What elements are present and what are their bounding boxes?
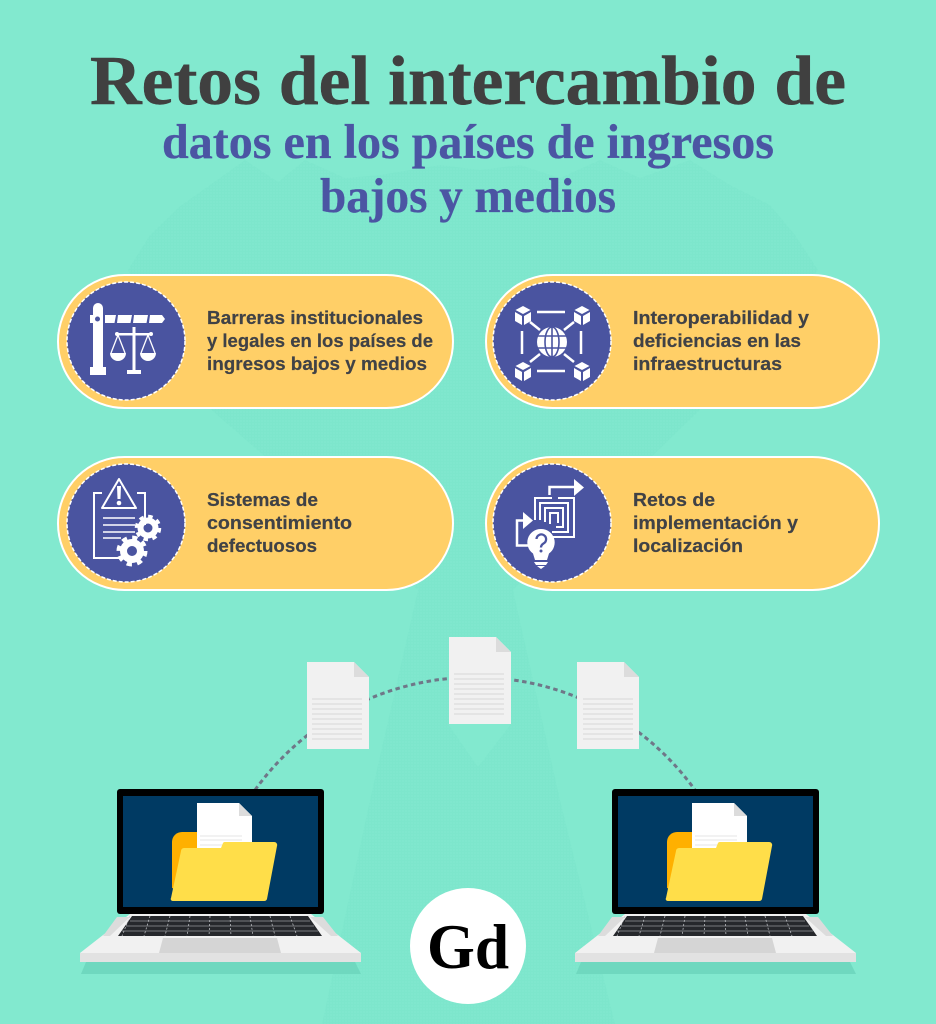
title line 3: bajos y medios: [320, 168, 616, 223]
label text: defectuosos: [207, 536, 317, 556]
pill background: [58, 457, 453, 590]
panel: barreras institucionales: [58, 275, 453, 408]
icon: document left: [307, 662, 369, 749]
icon: document right: [577, 662, 639, 749]
icon badge circle: [67, 464, 185, 582]
label text: localización: [633, 536, 743, 556]
label text: deficiencias en las: [633, 331, 801, 351]
label text: consentimiento: [207, 513, 352, 533]
icon: maze and light bulb: [517, 479, 584, 569]
label text: Retos de: [633, 490, 715, 510]
icon: warning document and gears: [94, 479, 160, 564]
icon badge circle: [67, 282, 185, 400]
title: [90, 43, 846, 223]
dotted transfer arc: [255, 677, 695, 790]
logo: Gd: [427, 911, 509, 982]
label text: Sistemas de: [207, 490, 318, 510]
label text: [207, 308, 433, 374]
label text: [633, 308, 809, 374]
laptop right: [575, 789, 856, 974]
title line 1: Retos del intercambio de: [90, 43, 846, 120]
label text: [633, 490, 798, 556]
icon: network globe: [515, 306, 590, 381]
pill background: [58, 275, 453, 408]
laptop left: [80, 789, 361, 974]
title line 2: datos en los países de ingresos: [162, 114, 774, 169]
label text: Interoperabilidad y: [633, 308, 809, 328]
label text: [207, 490, 352, 556]
label text: y legales en los países de: [207, 331, 433, 351]
panel: sistemas de consentimiento: [58, 457, 453, 590]
pill background: [486, 275, 879, 408]
label text: implementación y: [633, 513, 798, 533]
label text: Barreras institucionales: [207, 308, 423, 328]
label text: ingresos bajos y medios: [207, 354, 427, 374]
icon: barrier and scales: [90, 303, 165, 375]
pill background: [486, 457, 879, 590]
panel: retos de implementación: [486, 457, 879, 590]
panel: interoperabilidad: [486, 275, 879, 408]
icon: document center: [449, 637, 511, 724]
icon badge circle: [493, 464, 611, 582]
label text: infraestructuras: [633, 354, 782, 374]
logo: [410, 888, 526, 1004]
icon badge circle: [493, 282, 611, 400]
